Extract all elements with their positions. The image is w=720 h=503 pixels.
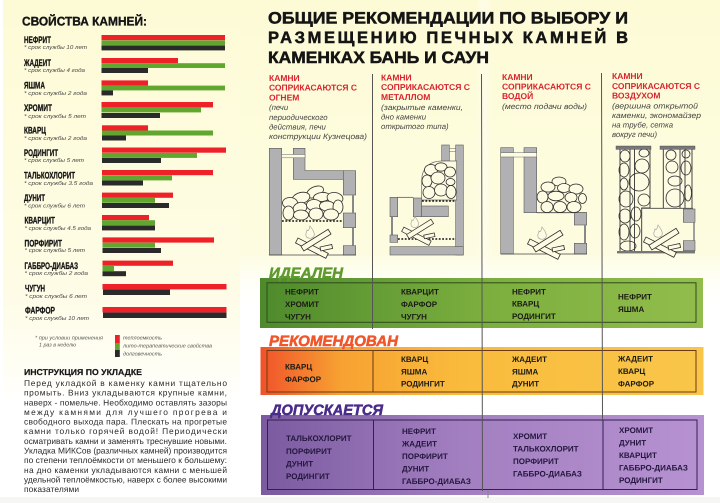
column 1 heading: КАМНИ bbox=[269, 73, 300, 83]
bar row: кварцит bbox=[24, 215, 155, 232]
bar row: чугун: ЧУГУН bbox=[25, 284, 45, 295]
heading: ideal: ИДЕАЛЕН bbox=[269, 265, 344, 282]
stones list: allowed: ДУНИТ bbox=[286, 460, 313, 468]
stones list: allowed: ГАББРО-ДИАБАЗ bbox=[513, 470, 582, 478]
bar row: порфирит bbox=[24, 237, 214, 254]
main title bbox=[268, 10, 628, 67]
stones list: recommended: КВАРЦ bbox=[401, 355, 428, 364]
column 4 heading: ВОЗДУХОМ bbox=[612, 90, 660, 100]
bar row: дунит bbox=[24, 193, 173, 210]
column dividers bbox=[372, 73, 602, 498]
bar row: хромит bbox=[24, 102, 213, 120]
bar row: габбро-диабаз: * срок службы 2 года bbox=[24, 270, 88, 277]
stones list: ideal: ЯШМА bbox=[618, 305, 644, 314]
diagram: stones touching air bbox=[616, 146, 695, 257]
heading: recommended: РЕКОМЕНДОВАН bbox=[269, 333, 399, 350]
column 4 heading: на трубе, сетка bbox=[612, 120, 674, 130]
bar row: яшма: ЯШМА bbox=[24, 80, 45, 92]
stones list: ideal: КВАРЦИТ bbox=[401, 288, 439, 296]
column 1 heading: конструкции Кузнецова) bbox=[269, 132, 367, 141]
stones list: allowed bbox=[286, 426, 688, 486]
stones list: recommended: ЯШМА bbox=[512, 368, 538, 376]
column 1 heading: ОГНЕМ bbox=[269, 93, 299, 103]
text block: laying instructions: промыть. Вниз укладываются крупные камни, bbox=[24, 388, 227, 398]
bar row: порфирит: * срок службы 5 лет bbox=[24, 247, 85, 254]
bar row: талькохлорит bbox=[24, 170, 213, 187]
legend: лито-терапевтические свойства bbox=[122, 344, 212, 350]
band: ideal bbox=[260, 278, 703, 328]
text block: laying instructions: удельной теплоёмкостью, наверх с более высокими bbox=[24, 474, 227, 484]
bar row: нефрит: НЕФРИТ bbox=[24, 35, 51, 46]
column 1 heading: периодического bbox=[269, 113, 328, 122]
bar row: талькохлорит: ТАЛЬКОХЛОРИТ bbox=[24, 170, 75, 182]
diagram: stones touching fire bbox=[269, 148, 356, 258]
column 2 heading: КАМНИ bbox=[381, 72, 412, 82]
text block: laying instructions: Укладка МИКСов (различных камней) производится bbox=[24, 446, 227, 456]
bar row: чугун: * срок службы 6 лет bbox=[25, 293, 87, 300]
bar row: порфирит: ПОРФИРИТ bbox=[24, 238, 62, 250]
stones list: allowed: ХРОМИТ bbox=[513, 432, 547, 441]
legend bbox=[35, 335, 212, 358]
stones list: allowed: КВАРЦИТ bbox=[619, 451, 657, 460]
bar row: нефрит bbox=[24, 35, 225, 51]
text block: laying instructions: Перед укладкой в каменку камни тщательно bbox=[24, 378, 227, 388]
stones list: ideal: ЧУГУН bbox=[401, 312, 427, 322]
bar row: габбро-диабаз: ГАББРО-ДИАБАЗ bbox=[24, 261, 78, 272]
stones list: recommended: ЯШМА bbox=[401, 368, 427, 377]
band: allowed bbox=[261, 415, 704, 495]
bar row: фарфор: ФАРФОР bbox=[25, 306, 55, 316]
stones list: allowed: ДУНИТ bbox=[402, 464, 429, 474]
legend: * при условии применения bbox=[35, 336, 103, 342]
column 1 heading: (печи bbox=[269, 103, 289, 112]
stones list: allowed: ДУНИТ bbox=[619, 438, 646, 448]
stones list: allowed: ТАЛЬКОХЛОРИТ bbox=[286, 434, 352, 443]
text block: laying instructions: наверх - помельче. Необходимо оставлять зазоры bbox=[24, 397, 227, 407]
band: recommended bbox=[260, 347, 704, 395]
column 4 heading: КАМНИ bbox=[612, 71, 643, 81]
column 3 heading: СОПРИКАСАЮТСЯ С bbox=[502, 82, 591, 92]
bar row: хромит: * срок службы 5 лет bbox=[24, 113, 86, 120]
stones list: allowed: ПОРФИРИТ bbox=[513, 457, 559, 466]
stones list: recommended: ФАРФОР bbox=[618, 380, 655, 388]
stones list: allowed: РОДИНГИТ bbox=[619, 476, 663, 485]
column 1 heading: действия, печи bbox=[269, 122, 327, 132]
bar row: талькохлорит: * срок службы 3.5 года bbox=[24, 180, 93, 187]
column 4 heading: вокруг печи) bbox=[612, 130, 657, 139]
stones list: recommended: ФАРФОР bbox=[285, 375, 322, 384]
stones list: allowed: ПОРФИРИТ bbox=[402, 452, 448, 461]
column 4 heading: каменки, экономайзер bbox=[612, 111, 702, 120]
stones list: allowed: НЕФРИТ bbox=[402, 427, 436, 436]
bar row: яшма: * срок службы 2 года bbox=[24, 90, 87, 97]
column 1 heading: СОПРИКАСАЮТСЯ С bbox=[269, 83, 357, 93]
text block: laying instructions bbox=[24, 367, 227, 494]
bar row: кварц: КВАРЦ bbox=[24, 126, 46, 136]
legend: теплоемкость bbox=[123, 336, 162, 342]
bar row: хромит: ХРОМИТ bbox=[24, 103, 52, 114]
stones list: ideal: ФАРФОР bbox=[401, 300, 438, 309]
diagram: stones touching metal bbox=[390, 145, 463, 255]
column 2 heading: МЕТАЛЛОМ bbox=[381, 92, 430, 102]
panel: stone properties bbox=[22, 14, 227, 494]
bar row: кварц: * срок службы 2 года bbox=[24, 135, 87, 142]
stones list: recommended: КВАРЦ bbox=[618, 367, 645, 376]
text block: laying instructions: камни только горячей водой! Периодически bbox=[24, 426, 227, 436]
stones list: ideal: ХРОМИТ bbox=[285, 300, 319, 309]
diagram: stones touching water bbox=[501, 148, 587, 259]
bar row: родингит: * срок службы 5 лет bbox=[24, 157, 84, 164]
bar row: жадеит bbox=[23, 58, 225, 74]
text block: laying instructions: осматривать камни и заменять треснувшие новыми. bbox=[24, 436, 227, 446]
column 2 heading: СОПРИКАСАЮТСЯ С bbox=[381, 82, 470, 92]
stones list: ideal: РОДИНГИТ bbox=[512, 312, 556, 321]
text block: laying instructions: по степени теплоёмкости от меньшего к большему: bbox=[24, 455, 227, 465]
column 1 heading bbox=[269, 73, 367, 141]
column 2 heading: (закрытые каменки, bbox=[381, 103, 463, 112]
text block: laying instructions: на дно каменки укладываются камни с меньшей bbox=[24, 465, 227, 475]
text block: laying instructions: показателями bbox=[24, 484, 79, 494]
stones list: recommended: ЖАДЕИТ bbox=[617, 354, 653, 364]
column 4 heading: (вершина открытой bbox=[612, 102, 699, 110]
heading: stone properties: СВОЙСТВА КАМНЕЙ: bbox=[22, 14, 147, 28]
bar row: родингит: РОДИНГИТ bbox=[24, 148, 58, 159]
bar row: нефрит: * срок службы 10 лет bbox=[24, 44, 87, 51]
stones list: ideal: ЧУГУН bbox=[285, 313, 311, 322]
legend: 1 раз в неделю bbox=[39, 342, 76, 348]
text block: laying instructions: между камнями для лучшего прогрева и bbox=[24, 407, 227, 417]
bar row: яшма bbox=[24, 80, 225, 97]
main title: РАЗМЕЩЕНИЮ ПЕЧНЫХ КАМНЕЙ В bbox=[268, 28, 628, 47]
stones list: allowed: ГАББРО-ДИАБАЗ bbox=[402, 477, 471, 486]
stones list: recommended: РОДИНГИТ bbox=[401, 380, 445, 389]
text block: laying instructions: ИНСТРУКЦИЯ ПО УКЛАДКЕ bbox=[24, 367, 142, 377]
bar row: жадеит: ЖАДЕИТ bbox=[23, 58, 51, 69]
bar row: фарфор bbox=[25, 306, 226, 322]
column 2 heading bbox=[381, 72, 470, 131]
heading: allowed: ДОПУСКАЕТСЯ bbox=[269, 402, 384, 419]
bar row: родингит bbox=[24, 148, 226, 164]
bar row: кварцит: КВАРЦИТ bbox=[24, 216, 55, 226]
stones list: allowed: РОДИНГИТ bbox=[286, 472, 330, 481]
bar row: дунит: * срок службы 6 лет bbox=[24, 203, 85, 210]
legend: долговечность bbox=[123, 352, 162, 358]
column 2 heading: дно каменки bbox=[381, 112, 427, 122]
bar row: габбро-диабаз bbox=[24, 261, 173, 277]
stones list: recommended: ДУНИТ bbox=[512, 380, 539, 389]
stones list: recommended: ЖАДЕИТ bbox=[511, 355, 547, 364]
stones list: recommended: КВАРЦ bbox=[285, 362, 312, 372]
stones list: allowed: ТАЛЬКОХЛОРИТ bbox=[513, 444, 579, 454]
stones list: allowed: ПОРФИРИТ bbox=[286, 447, 332, 456]
column 4 heading: СОПРИКАСАЮТСЯ С bbox=[612, 81, 700, 91]
text block: laying instructions: свободного выхода пара. Плескать на прогретые bbox=[24, 417, 227, 427]
main title: ОБЩИЕ РЕКОМЕНДАЦИИ ПО ВЫБОРУ И bbox=[268, 10, 628, 28]
bar row: кварц bbox=[24, 125, 213, 142]
stones list: ideal: КВАРЦ bbox=[512, 300, 539, 308]
stones list: allowed: ГАББРО-ДИАБАЗ bbox=[619, 464, 688, 472]
stones list: ideal: НЕФРИТ bbox=[285, 288, 319, 297]
stones list: ideal: НЕФРИТ bbox=[618, 292, 652, 302]
column 4 heading bbox=[612, 71, 702, 139]
stones list: ideal bbox=[285, 288, 652, 322]
bar row: чугун bbox=[25, 284, 226, 300]
bar row: жадеит: * срок службы 4 года bbox=[24, 67, 85, 74]
main title: КАМЕНКАХ БАНЬ И САУН bbox=[268, 49, 489, 67]
column 3 heading bbox=[502, 72, 591, 111]
bar row: кварцит: * срок службы 4.5 года bbox=[24, 225, 91, 232]
stones list: allowed: ЖАДЕИТ bbox=[401, 440, 437, 448]
column 3 heading: КАМНИ bbox=[502, 72, 533, 82]
column 3 heading: ВОДОЙ bbox=[502, 91, 533, 101]
stones list: ideal: НЕФРИТ bbox=[512, 288, 546, 296]
stones list: recommended bbox=[285, 354, 655, 389]
column 3 heading: (место подачи воды) bbox=[502, 102, 587, 111]
column 2 heading: открытого типа) bbox=[381, 122, 449, 131]
bar row: фарфор: * срок службы 10 лет bbox=[25, 315, 89, 322]
bar row: дунит: ДУНИТ bbox=[24, 193, 45, 204]
stones list: allowed: ХРОМИТ bbox=[619, 426, 653, 435]
